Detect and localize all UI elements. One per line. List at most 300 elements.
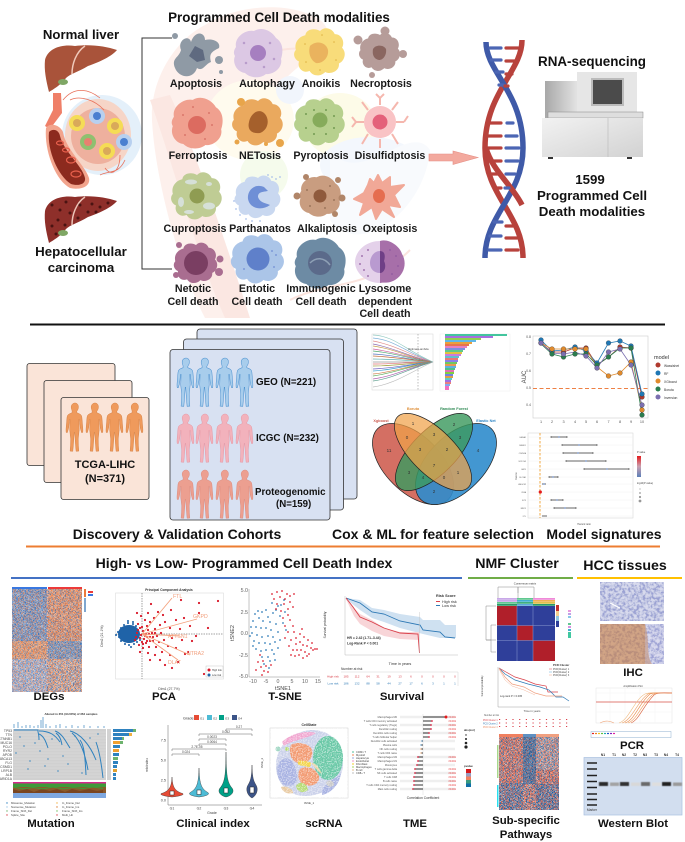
chart: survival curve: Survival probability	[323, 611, 327, 638]
NMF risk table: PCD Cluster 2	[483, 722, 498, 726]
mutation side gene labels: APOB	[3, 753, 13, 757]
violin legend: G2	[213, 716, 217, 720]
AUC x ticks: 5	[585, 420, 587, 424]
AUC x ticks: 4	[574, 420, 576, 424]
TME p-values: <0.001	[448, 760, 456, 763]
cell: entotic cell death	[231, 234, 284, 284]
icon: liver tumour microenvironment with vessel	[45, 90, 142, 189]
panel: validation cohort cards	[170, 329, 357, 520]
venn counts: 4	[477, 448, 480, 453]
label: netotic cell death: Netotic	[175, 283, 211, 295]
TME row labels: NK cells activated	[377, 772, 398, 775]
bracket connecting liver to modalities	[142, 38, 172, 269]
TME p-values: <0.001	[448, 732, 456, 735]
AUC axis labels: 0.6	[526, 369, 531, 373]
label: mutation: Mutation	[27, 818, 75, 830]
AUC x ticks: 1	[540, 420, 542, 424]
TME row labels: T cells CD8	[384, 776, 398, 779]
mutation side gene labels: TP53	[4, 729, 12, 733]
chart: clinical index violins: 2.7E-05	[191, 745, 203, 749]
venn counts: 1	[412, 421, 415, 426]
TME p-values: <0.001	[448, 784, 456, 787]
mutation side gene labels: RYR2	[3, 749, 12, 753]
scRNA legend: B cell	[356, 768, 363, 772]
survival risk table: 1	[454, 682, 456, 686]
forest row labels: NOTCH3	[519, 461, 526, 463]
mutation legend: In_Frame_Ins	[62, 805, 80, 809]
label: immunogenic cell death: Cell death	[295, 296, 347, 308]
chart: DEGs heatmap	[12, 587, 93, 692]
t-SNE blue points	[250, 600, 286, 668]
chart: clinical index violins: G2	[197, 806, 201, 810]
survival risk table: 64	[366, 674, 370, 678]
scRNA legend: CD8+ T	[356, 771, 365, 775]
icon: normal liver	[45, 45, 117, 92]
cell: ferroptosis	[172, 98, 223, 149]
label: GEO: GEO (N=221)	[256, 377, 316, 388]
forest row labels: CDKN2A	[519, 452, 527, 455]
forest legend: log10(P value)	[637, 482, 653, 485]
violin axis: 0.0	[161, 798, 166, 802]
survival legend: Low risk	[442, 604, 456, 608]
cluster shapes	[270, 728, 348, 798]
TME p-values: <0.001	[448, 720, 456, 723]
mutation side gene labels: CSMD1	[0, 765, 12, 769]
NMF survival legend: PCD(Cluster) 2	[553, 671, 570, 674]
chart: t-SNE scatter: -10	[249, 679, 257, 685]
chart: forest plot of model signatures: Gene	[514, 472, 518, 480]
scRNA axis labels: tSNE_2	[260, 758, 264, 768]
PCA loading labels	[168, 594, 208, 666]
chart: AUC line plot	[522, 335, 679, 424]
AUC x ticks: 9	[630, 420, 632, 424]
AUC axis labels: 0.4	[526, 403, 531, 407]
venn counts: 2	[433, 489, 436, 494]
scRNA legend: Macrophages	[356, 765, 372, 769]
icon: DNA double helix	[485, 40, 523, 258]
cell: immunogenic cell death	[295, 238, 346, 289]
TME p-values: <0.001	[448, 724, 456, 727]
AUC model legend: model	[654, 355, 669, 361]
label: PCR: PCR	[620, 740, 644, 752]
label: parthanatos: Parthanatos	[229, 223, 291, 235]
violin legend: G3	[225, 716, 229, 720]
faded background illustration	[150, 7, 430, 318]
AUC model legend: Inversion	[664, 396, 678, 400]
label: lysosome dependent cell death	[358, 283, 412, 320]
mutation side gene labels: FLG	[5, 761, 12, 765]
label: TCGA-LIHC: (N=371)	[85, 473, 125, 485]
TME row labels: T cells CD4 memory activated	[364, 720, 398, 723]
mutation legend: Splice_Site	[11, 813, 25, 817]
label: entotic cell death	[231, 283, 283, 308]
lane labels: N2	[622, 753, 626, 757]
PCA legend: Low risk	[212, 674, 222, 677]
NMF dendrograms	[486, 587, 534, 652]
chart: t-SNE scatter: 15	[315, 679, 321, 685]
ladder	[587, 763, 597, 805]
survival risk table: 0	[454, 674, 456, 678]
chart: t-SNE scatter: 5	[291, 679, 294, 685]
TME row labels: Macrophages M1	[378, 760, 398, 763]
chart: mutation oncoplot	[0, 712, 136, 817]
label: lysosome dependent cell death: Lysosome	[359, 283, 411, 295]
mutation side gene labels: MUC16	[0, 741, 12, 745]
mutation legend: Frame_Shift_Del	[11, 809, 32, 813]
chart: TME lollipop	[364, 714, 475, 800]
NMF survival legend: PCD(Cluster) 1	[553, 668, 570, 671]
survival stats: HR = 2.42 (1.71–3.44)	[347, 636, 381, 640]
AUC axis title: AUC	[522, 370, 528, 383]
t-SNE red points	[256, 591, 317, 675]
section rule: green	[468, 577, 573, 579]
divider: orange	[26, 546, 660, 548]
survival risk table: 17	[409, 682, 413, 686]
chart: forest plot of model signatures	[514, 433, 653, 526]
PCA loading labels: HTRA2	[187, 651, 204, 657]
TME row labels: T cells gamma delta	[375, 768, 398, 771]
chart: clinical index violins: G1	[170, 806, 174, 810]
NMF risk table: PCD Cluster 1	[483, 719, 498, 722]
TME row labels: Dendritic resting	[379, 728, 398, 731]
label: immunogenic cell death	[286, 283, 356, 308]
label: entotic cell death: Entotic	[239, 283, 275, 295]
icons: salmon people, proteogenomic	[177, 470, 253, 518]
chart: t-SNE scatter: tSNE2	[230, 625, 236, 641]
venn set names	[373, 407, 496, 423]
label: lysosome dependent cell death: dependent	[358, 296, 412, 308]
chart: NMF survival	[481, 663, 570, 729]
mutation side gene labels: ARID1A	[0, 777, 13, 781]
scRNA legend	[352, 750, 372, 775]
survival risk table: 112	[355, 674, 360, 678]
forest row labels: SLC2A1	[519, 476, 526, 479]
lane labels: T1	[612, 753, 616, 757]
venn set names: Boruta	[407, 407, 420, 411]
cell: parthanatos	[234, 175, 280, 221]
heading: hepatocellular carcinoma: Hepatocellular	[35, 244, 127, 259]
TME row labels: Dendritic cells resting	[373, 732, 398, 735]
NMF survival legend	[549, 668, 570, 677]
chart: NMF survival: PCD Cluster	[553, 663, 570, 667]
survival risk table: High risk	[327, 674, 339, 678]
PCA legend	[206, 666, 223, 677]
mutation side gene labels: LRP1B	[1, 769, 13, 773]
NMF matrix blocks	[497, 606, 555, 661]
AUC series points	[539, 338, 644, 417]
label: sub-specific pathways: Pathways	[500, 829, 552, 841]
label: ICGC: ICGC (N=232)	[256, 433, 319, 444]
violin legend: Grade	[183, 716, 194, 720]
survival confidence bands	[346, 598, 456, 638]
survival risk table	[327, 667, 458, 686]
PCA loading labels: FTL	[173, 594, 182, 600]
survival risk table: 6	[410, 674, 412, 678]
lane labels: N3	[643, 753, 647, 757]
scRNA legend: Hepatocyte	[356, 756, 370, 760]
label: netotic cell death: Cell death	[167, 296, 219, 308]
TME row labels: T cells CD4 memory resting	[366, 784, 398, 787]
chart: clinical index violins: G3	[224, 806, 228, 810]
survival legend	[436, 594, 457, 608]
survival risk table: 0	[432, 674, 434, 678]
chart: clinical index violins: 0.27	[236, 725, 242, 729]
NMF survival axis labels: Time in years	[524, 709, 541, 713]
NMF colourbar and legend	[556, 605, 571, 638]
chart: scRNA t-SNE clusters	[260, 723, 372, 805]
PCA red points	[135, 600, 218, 674]
scRNA legend: Fibroblast	[356, 762, 368, 766]
NMF survival lines	[499, 668, 558, 692]
label: immunogenic cell death: Immunogenic	[286, 283, 356, 295]
AUC x ticks	[540, 420, 644, 424]
chart: PCR amplification plot: Amplification Plot	[623, 685, 643, 688]
mutation side gene labels: ALB	[6, 773, 13, 777]
t-SNE axis ticks: 5.0	[241, 588, 248, 594]
cell: cuproptosis	[171, 172, 222, 219]
violin brackets	[172, 729, 252, 756]
label: autophagy: Autophagy	[239, 78, 295, 90]
label: clinical index: Clinical index	[176, 818, 250, 830]
scRNA axis labels	[260, 758, 314, 805]
TME dots	[444, 716, 448, 718]
chart: scRNA t-SNE clusters: CellState	[302, 723, 317, 727]
heading: discovery and validation cohorts: Discovery & Validation Cohorts	[73, 526, 281, 542]
mutation legend: Frame_Shift_Ins	[62, 809, 83, 813]
TME row labels: Monocytes	[385, 764, 398, 767]
mutation legend: In_Frame_Del	[62, 801, 80, 805]
AUC x ticks: 6	[596, 420, 598, 424]
chart: clinical index violins: 0.0064	[207, 740, 217, 744]
AUC model legend: XGboost	[664, 380, 677, 384]
AUC axis labels	[526, 335, 531, 407]
chart: clinical index violins: mtcIndex	[145, 758, 149, 772]
TME size legend: abs(cor)	[464, 728, 475, 732]
mutation side gene labels: PCLO	[3, 745, 12, 749]
label: cuproptosis: Cuproptosis	[164, 223, 227, 235]
label: netotic cell death	[167, 283, 219, 308]
TME row labels: T cells regulatory (Tregs)	[369, 724, 397, 727]
venn set names: Random Forest	[440, 407, 469, 411]
chart: clinical index violins: Grade	[207, 811, 217, 815]
pathway annotation bars	[499, 734, 523, 737]
chart: t-SNE scatter: 10	[302, 679, 308, 685]
scRNA legend: Myeloid	[356, 753, 365, 757]
forest legend: P value	[637, 451, 646, 454]
NMF annotation bars	[497, 598, 555, 606]
lane labels: N4	[664, 753, 668, 757]
bands	[599, 782, 682, 786]
violin legend: G1	[200, 716, 204, 720]
chart: western blot: Marker	[587, 808, 598, 812]
chart: PCA biplot	[100, 588, 224, 691]
venn counts: 3	[408, 470, 411, 475]
heading: Cox and ML: Cox & ML for feature selection	[332, 526, 534, 542]
label: sub-specific pathways: Sub-specific	[492, 815, 560, 827]
forest row labels: FTL	[523, 516, 526, 518]
chart: survival curve	[323, 594, 458, 686]
TME p-values: <0.001	[448, 716, 456, 719]
label: proteogenomic	[255, 487, 326, 510]
label: scRNA: scRNA	[305, 818, 343, 830]
cell: disulfidptosis	[352, 94, 408, 148]
violin axis: 7.5	[161, 738, 166, 742]
chart: clinical index violins	[145, 715, 262, 815]
image: IHC high expression	[600, 624, 664, 664]
survival risk table: 185	[343, 674, 349, 678]
survival legend: High risk	[442, 600, 457, 604]
section rule: blue	[11, 577, 462, 579]
TME p-values: <0.001	[448, 756, 456, 759]
cell: anoikis	[294, 28, 345, 75]
cell: lysosome dependent cell death	[355, 240, 405, 283]
scRNA axis labels: tSNE_1	[304, 801, 314, 805]
mutation legend	[6, 801, 83, 817]
venn counts: 4	[422, 475, 425, 480]
forest row labels: CD8A	[521, 491, 527, 494]
forest intervals	[542, 437, 629, 516]
lane labels	[601, 753, 679, 757]
venn counts: 11	[387, 448, 392, 453]
TME p-values: <0.001	[448, 776, 456, 779]
venn counts: 7	[433, 463, 436, 468]
label: ferroptosis: Ferroptosis	[169, 150, 227, 162]
AUC axis labels: 0.5	[526, 386, 531, 390]
violin axis	[161, 738, 166, 802]
survival stats	[347, 636, 381, 646]
NMF risk table: Number at risk	[484, 714, 500, 717]
TME p-values: <0.001	[448, 728, 456, 731]
mutation side gene labels: TTN	[5, 733, 13, 737]
venn counts: 2	[446, 447, 449, 452]
PCA loading labels: DLAT	[168, 660, 182, 666]
venn counts: 3	[419, 447, 422, 452]
lane labels: N1	[601, 753, 605, 757]
cell: pyroptosis	[294, 98, 345, 145]
heading: RNA-sequencing: RNA-sequencing	[538, 54, 646, 69]
label: alkaliptosis: Alkaliptosis	[297, 223, 357, 235]
violin legend: G4	[238, 716, 242, 720]
AUC x ticks: 8	[619, 420, 621, 424]
TME p-values: <0.001	[448, 736, 456, 739]
mutation classes stacked band	[13, 782, 106, 798]
venn ellipses	[358, 401, 511, 519]
label: proteogenomic: Proteogenomic	[255, 487, 326, 498]
survival legend: Risk Score	[436, 594, 456, 598]
t-SNE axis ticks: 2.5	[241, 610, 248, 616]
survival risk table: 186	[343, 682, 349, 686]
image: IHC low expression	[600, 582, 664, 621]
AUC series lines	[541, 340, 642, 415]
chart: PCA biplot: Principal Component Analysis	[145, 588, 193, 592]
TME p-values	[448, 716, 456, 791]
survival risk table: 13	[398, 674, 402, 678]
heading: carcinoma line: carcinoma	[48, 260, 115, 275]
venn set names: Xgboost	[373, 419, 389, 423]
chart: feature importance bars	[440, 334, 510, 391]
cell: apoptosis	[172, 33, 223, 76]
heading: high vs low index: High- vs Low- Programmed Cell Death Index	[96, 555, 393, 571]
icon: diseased liver	[45, 196, 117, 243]
heading: HCC tissues: HCC tissues	[583, 558, 667, 574]
lane labels: T2	[633, 753, 637, 757]
heading: model signatures: Model signatures	[546, 526, 662, 542]
chart: clinical index violins: 0.024	[182, 750, 190, 754]
chart: lasso coefficient paths: Optimal Lambda	[408, 347, 429, 351]
forest row labels: FLT3	[522, 500, 526, 502]
survival axis labels: Time in years	[389, 662, 411, 666]
cell: oxeiptosis	[354, 175, 404, 219]
text: 1599 programmed cell death modalities: Death modalities	[539, 204, 645, 219]
text: 1599 programmed cell death modalities: 1599	[575, 172, 605, 187]
heading: normal liver: Normal liver	[43, 27, 119, 42]
NMF risk table	[483, 714, 569, 729]
AUC model legend: RF	[664, 372, 668, 376]
TME p-values: <0.001	[448, 788, 456, 791]
AUC x ticks: 10	[640, 420, 644, 424]
section rule: yellow	[577, 577, 682, 579]
forest row labels: HMGCS2	[518, 484, 526, 486]
label: necroptosis: Necroptosis	[350, 78, 412, 90]
survival risk table: 3	[432, 682, 434, 686]
label: anoikis: Anoikis	[302, 78, 340, 90]
survival stats: Log-Rank P < 0.001	[347, 642, 378, 646]
venn counts: 1	[457, 470, 460, 475]
NMF risk table: PCD Cluster 3	[483, 726, 498, 729]
text: 1599 programmed cell death modalities: Programmed Cell	[537, 188, 647, 203]
TME row labels: Macrophages M2	[378, 756, 398, 759]
TME p-values: <0.001	[448, 768, 456, 771]
heading: NMF cluster: NMF Cluster	[475, 556, 559, 572]
venn counts: 2	[453, 422, 456, 427]
label: sub-specific pathways	[492, 815, 560, 841]
TME size legend	[464, 728, 475, 787]
mutation waterfalls	[14, 730, 103, 778]
PCR curves	[600, 693, 672, 723]
survival risk table: 44	[387, 682, 391, 686]
mutation right bars	[113, 729, 136, 780]
AUC axis labels: 0.7	[526, 352, 531, 356]
lane labels: T3	[654, 753, 658, 757]
t-SNE axis ticks: -5.0	[239, 674, 248, 680]
forest row labels: G6PD	[521, 469, 527, 471]
AUC model legend: Boruta	[664, 388, 674, 392]
scRNA legend: C0/M1 T	[356, 750, 366, 754]
AUC model legend: Wassishet	[664, 364, 679, 368]
TME row labels: B cells naive	[383, 780, 398, 783]
survival risk table: 132	[354, 682, 360, 686]
t-SNE axis ticks: 0.0	[241, 631, 248, 637]
violin shapes	[161, 777, 183, 797]
venn counts: 0	[406, 435, 409, 440]
venn set names: Elastic Net	[476, 419, 496, 423]
forest axis title: Hazard ratio	[577, 523, 591, 526]
TME row labels	[364, 716, 398, 791]
survival risk table: 31	[376, 674, 380, 678]
PCR legend	[591, 732, 671, 738]
t-SNE axis ticks: -2.5	[239, 653, 248, 659]
TME p-values: <0.001	[448, 772, 456, 775]
chart: NMF consensus matrix: Consensus matrix	[514, 582, 537, 586]
NMF survival legend: PCD(Cluster) 3	[553, 674, 570, 677]
chart: PCA biplot: Dim2 (21.1%)	[100, 625, 104, 647]
TME axis title: Correlation Coefficient	[407, 796, 439, 800]
label: TME: TME	[403, 818, 427, 830]
AUC axis labels: 0.8	[526, 335, 531, 339]
text: 1599 programmed cell death modalities	[537, 172, 647, 219]
label: pyroptosis: Pyroptosis	[293, 150, 349, 162]
chart: NMF consensus matrix	[486, 582, 571, 661]
